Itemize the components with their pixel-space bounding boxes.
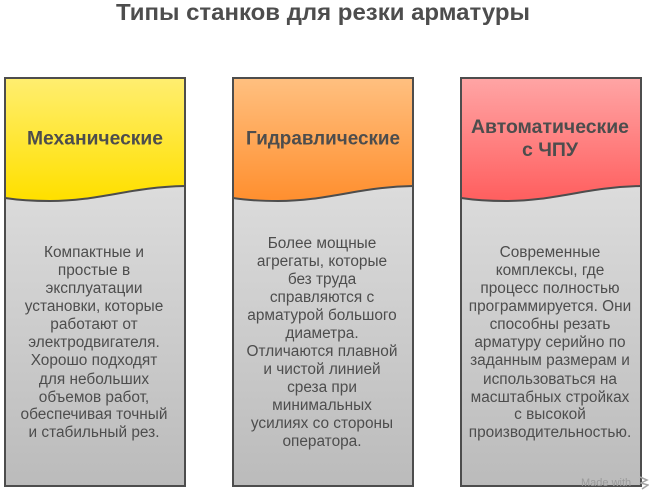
text: mechanical description: и стабильный рез. xyxy=(29,424,159,441)
text: hydraulic description: и чистой линией xyxy=(263,361,381,378)
text: CNC description: масштабных стройках xyxy=(471,389,630,406)
text: CNC description: арматуру серийно по xyxy=(474,334,626,351)
text: hydraulic description: среза при xyxy=(287,379,357,396)
text: mechanical description: электродвигателя. xyxy=(28,334,160,351)
text: hydraulic description: усилиях со стороны xyxy=(251,415,393,432)
text: CNC description: Современные xyxy=(500,244,600,261)
text: CNC description: программируется. Они xyxy=(469,298,631,315)
text: CNC description: комплексы, где xyxy=(496,262,604,279)
text: mechanical description xyxy=(21,244,167,441)
text: hydraulic description: агрегаты, которые xyxy=(257,253,387,270)
text: CNC description: способны резать xyxy=(490,316,610,333)
text: hydraulic description: Более мощные xyxy=(268,235,376,252)
heading: CNC: Автоматические xyxy=(471,116,629,138)
text: hydraulic description: без труда xyxy=(288,271,357,288)
panel: CNC: с ЧПУ xyxy=(522,139,579,161)
text: mechanical description: объемов работ, xyxy=(39,389,149,406)
text: mechanical description: эксплуатации xyxy=(46,280,142,297)
panel: CNC xyxy=(461,78,641,486)
text: mechanical description: обеспечивая точный xyxy=(21,406,167,423)
text: hydraulic description: Отличаются плавной xyxy=(247,343,397,360)
panel: mechanical xyxy=(5,78,185,486)
text: hydraulic description: оператора. xyxy=(282,433,362,450)
text: mechanical description: работают от xyxy=(50,316,138,333)
watermark: Made with xyxy=(581,477,631,489)
text: mechanical description: Хорошо подходят xyxy=(31,352,157,369)
text: hydraulic description: минимальных xyxy=(272,397,372,414)
text: CNC description: использоваться на xyxy=(483,371,617,388)
panel: hydraulic xyxy=(233,78,413,486)
text: hydraulic description: диаметра. xyxy=(285,325,359,342)
text: hydraulic description: арматурой большого xyxy=(247,307,397,324)
text: CNC description: процесс полностью xyxy=(480,280,620,297)
heading: hydraulic: Гидравлические xyxy=(246,128,400,150)
heading: mechanical: Механические xyxy=(27,128,163,150)
text: hydraulic description xyxy=(247,235,397,450)
text: CNC description: с высокой xyxy=(514,406,586,423)
text: mechanical description: Компактные и xyxy=(44,244,144,261)
text: CNC description xyxy=(469,244,631,441)
text: mechanical description: простые в xyxy=(58,262,130,279)
text: hydraulic description: справляются с xyxy=(270,289,374,306)
text: CNC description: производительностью. xyxy=(469,424,631,441)
text: mechanical description: для небольших xyxy=(39,371,149,388)
text: mechanical description: установки, которые xyxy=(25,298,163,315)
text: CNC description: заданным размерам и xyxy=(470,352,630,369)
